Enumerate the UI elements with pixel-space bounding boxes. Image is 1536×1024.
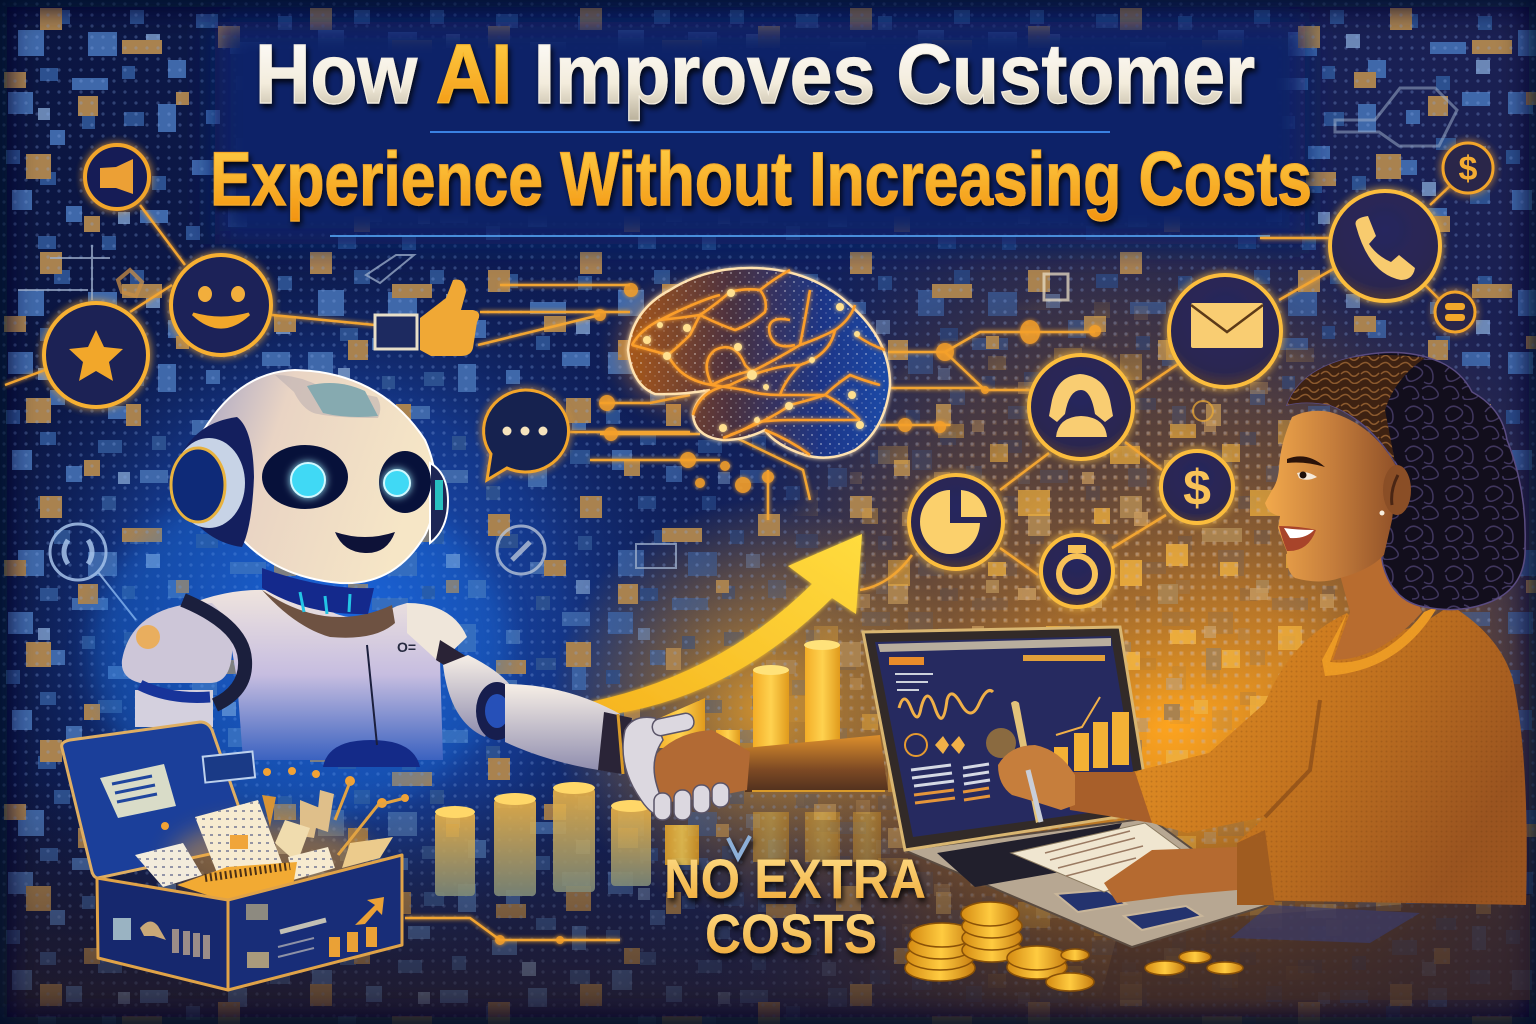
caption: no extra costs xyxy=(664,836,926,965)
human hand xyxy=(650,730,750,802)
notepad xyxy=(1011,823,1195,892)
brain specks xyxy=(628,268,890,458)
icon: faint headset xyxy=(50,524,136,620)
keyboard xyxy=(937,823,1122,887)
brain xyxy=(620,268,890,458)
faint papers on desk xyxy=(1230,905,1420,943)
icon: chat bubble xyxy=(484,390,569,480)
neck xyxy=(1333,540,1422,660)
icon: faint wrench xyxy=(497,526,545,574)
robot xyxy=(90,370,632,820)
title line 1: How AI Improves Customer xyxy=(255,27,1255,121)
icon: pie chart xyxy=(909,475,1003,569)
icon: dollar medium: $ xyxy=(1183,460,1211,516)
icon: dollar small xyxy=(1443,143,1493,193)
icon: dollar small: $ xyxy=(1459,150,1478,188)
caption: no extra costs: COSTS xyxy=(705,902,877,965)
icon: dollar medium xyxy=(1161,451,1233,523)
icon: small badge xyxy=(1435,292,1475,332)
icon: thumbs up xyxy=(375,280,479,356)
connector nodes xyxy=(495,283,1101,945)
icon: support person xyxy=(1029,355,1133,459)
brain nodes xyxy=(643,289,864,432)
icon: phone xyxy=(1330,191,1440,301)
typing hand xyxy=(1104,847,1237,903)
sweater xyxy=(1132,605,1527,905)
hair front xyxy=(1287,355,1425,462)
desk cards xyxy=(1056,890,1202,930)
rear bars xyxy=(655,640,881,865)
knit texture xyxy=(1132,605,1527,905)
robot body: O= xyxy=(397,639,416,655)
arm with stylus xyxy=(998,745,1152,823)
title line 2: Experience Without Increasing Costs xyxy=(210,137,1312,222)
title xyxy=(210,27,1312,222)
robot eyes xyxy=(262,445,431,513)
laptop screen xyxy=(863,627,1150,850)
icon: smiley xyxy=(171,255,271,355)
robot arm xyxy=(407,603,632,774)
laptop base xyxy=(904,818,1268,947)
arrow: growth xyxy=(590,534,862,716)
icon: mail xyxy=(1169,275,1281,387)
hair xyxy=(1287,352,1525,610)
robot neck xyxy=(262,568,374,614)
box decorations xyxy=(113,897,384,968)
desk xyxy=(1100,895,1530,1000)
box of documents xyxy=(62,722,409,990)
person xyxy=(998,352,1527,905)
brain outline xyxy=(628,268,890,458)
human arm in handshake xyxy=(745,735,888,792)
caption: no extra costs: NO EXTRA xyxy=(664,847,926,910)
robot ear xyxy=(171,417,448,547)
growth bars xyxy=(435,640,881,896)
icon: megaphone xyxy=(85,145,149,209)
network connectors xyxy=(5,184,1452,940)
robot hand xyxy=(623,712,729,820)
laptop xyxy=(863,627,1268,947)
robot head xyxy=(171,370,448,583)
brain circuits xyxy=(632,270,885,455)
check mark xyxy=(728,836,750,858)
head panel xyxy=(275,375,380,418)
icon: star xyxy=(44,303,148,407)
box xyxy=(97,855,402,990)
tablet xyxy=(62,722,255,878)
robot body xyxy=(90,480,510,820)
face xyxy=(1265,411,1398,582)
coins xyxy=(905,902,1243,991)
stylus xyxy=(1011,701,1041,823)
lower sleeve xyxy=(1237,830,1275,905)
title divider lines xyxy=(330,132,1270,236)
sparks and papers xyxy=(135,767,409,902)
icon: power dial xyxy=(1041,535,1113,607)
robot smile xyxy=(335,532,395,553)
notepad sketch xyxy=(1045,831,1143,876)
faint icons xyxy=(18,88,1457,568)
facial features xyxy=(1279,456,1411,551)
front bars xyxy=(435,782,651,896)
sweater collar xyxy=(1322,606,1438,676)
sleeve fold xyxy=(1265,700,1320,817)
